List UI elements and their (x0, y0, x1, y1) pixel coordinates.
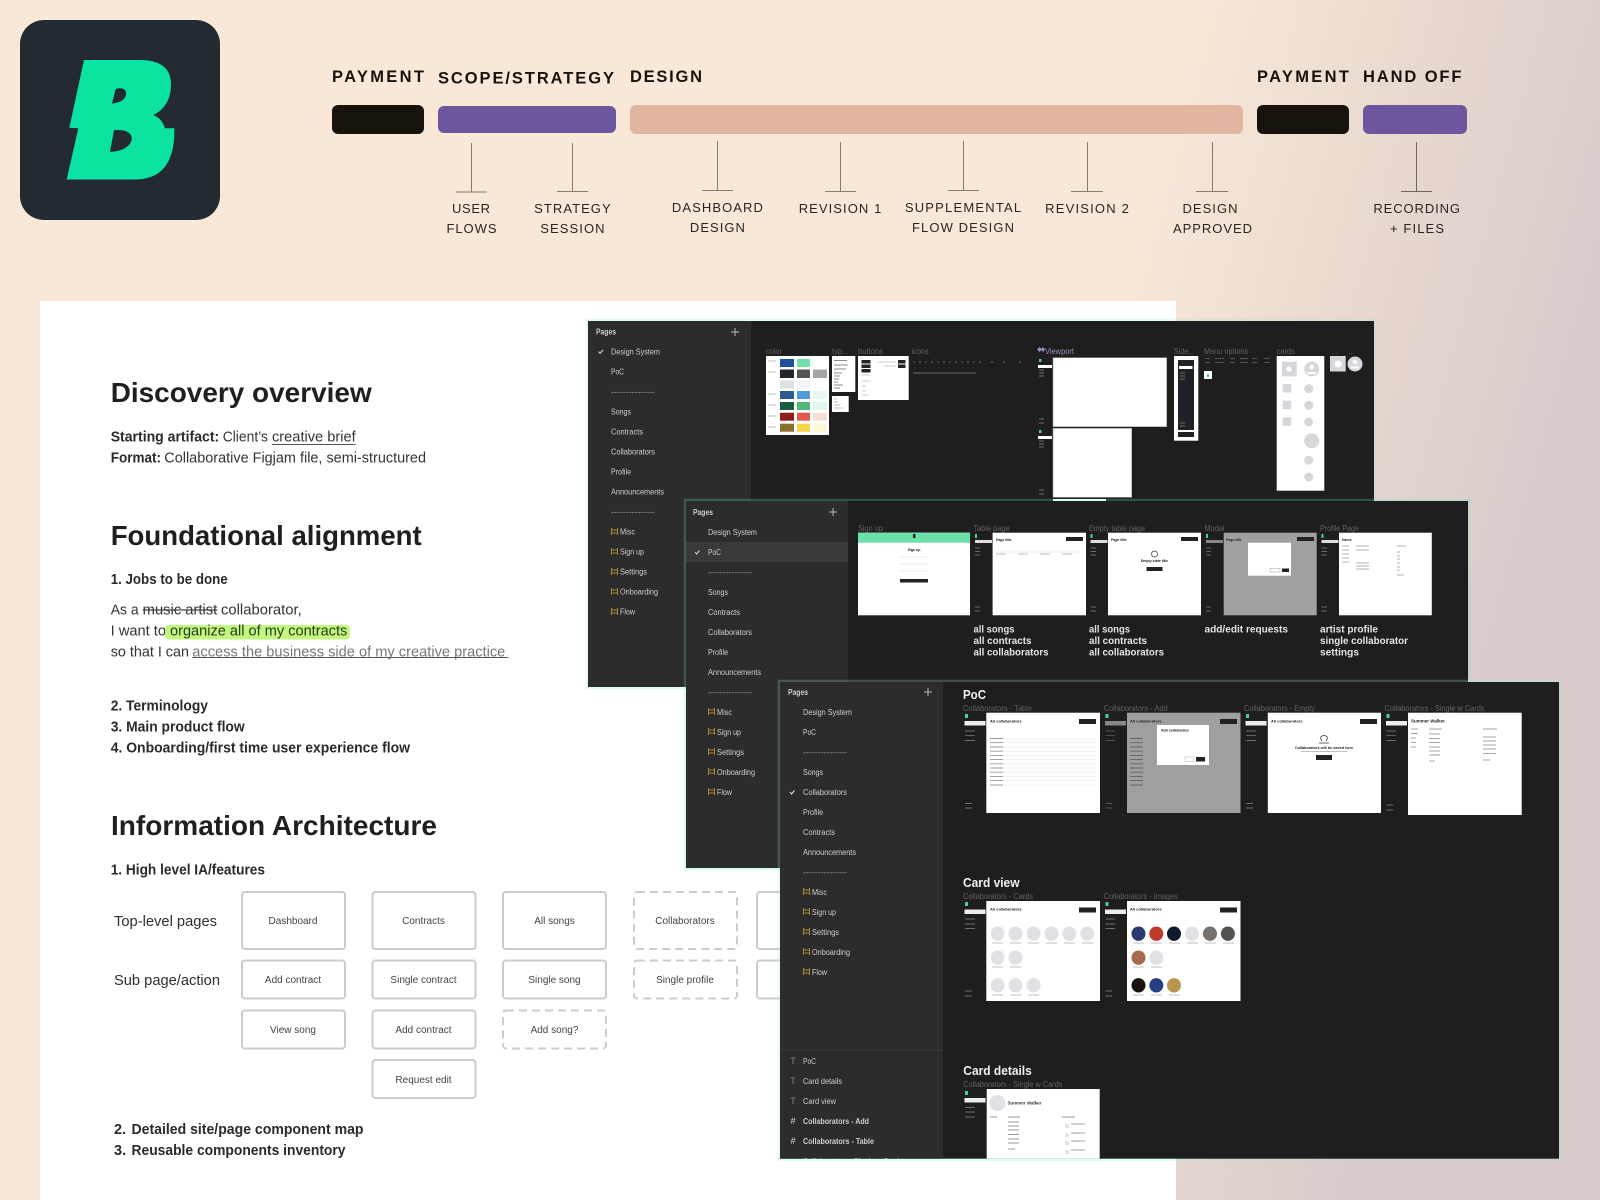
milestone: recording + files (1373, 142, 1460, 236)
section: card details frame (963, 1063, 1100, 1159)
sidebar: Pages (788, 688, 808, 697)
frame: collaborators empty: All collaborators (1271, 718, 1303, 724)
frame: collaborators single (1384, 704, 1522, 815)
frame: collaborators single: Summer Walker (1411, 718, 1445, 724)
panel: figma PoC templates (685, 500, 1469, 869)
frame: collaborators add: Collaborators - Add (1104, 704, 1168, 713)
frame: sign up: Sign up (858, 524, 884, 533)
sidebar component card (1174, 356, 1198, 441)
sidebar: Card view (803, 1097, 836, 1106)
phase: design (630, 68, 1243, 134)
sidebar: T (790, 1056, 796, 1066)
section: card details frame: Summer Walker (1008, 1100, 1042, 1106)
milestone: recording + files: RECORDING (1373, 201, 1460, 216)
sidebar: T (790, 1096, 796, 1106)
frame: profile page: Name (1342, 538, 1352, 542)
sidebar: PoC (803, 1057, 816, 1066)
job story line 2: organize all of my contracts (170, 624, 347, 640)
small avatars: ... (1331, 347, 1338, 356)
typography cards (832, 356, 855, 412)
sidebar: Sign up (620, 548, 644, 556)
starting artifact line: Starting artifact: (111, 430, 219, 446)
milestone: dashboard design (672, 141, 763, 235)
milestone: supplemental flow design: SUPPLEMENTAL (905, 200, 1021, 215)
milestone: dashboard design: DESIGN (690, 220, 745, 235)
starting artifact line: Client’s (223, 430, 268, 446)
frame: sign up (858, 524, 970, 615)
phase: hand off: HAND OFF (1363, 68, 1462, 86)
row label: sub page/action: Sub page/action (114, 973, 220, 989)
sidebar: Onboarding (620, 588, 658, 596)
frame: collaborators add: Add collaborator (1161, 728, 1190, 732)
sidebar: Settings (717, 748, 744, 757)
milestone: supplemental flow design (905, 141, 1021, 235)
job story line 1 (111, 602, 302, 618)
section: PoC frames (963, 687, 1522, 815)
sidebar: Contracts (611, 428, 643, 436)
frame: collaborators table (963, 704, 1100, 813)
sidebar: Sign up (717, 728, 741, 737)
frame: collaborators images: All collaborators (1130, 906, 1162, 912)
section: card view frames (963, 875, 1240, 1001)
sidebar: PoC (803, 728, 816, 737)
frame: empty table page: Empty state title (1141, 559, 1168, 563)
sidebar: Pages (693, 508, 713, 517)
phase: payment 2 (1257, 68, 1349, 134)
frame: modal: Page title (1226, 538, 1242, 542)
panel: figma design system (587, 320, 1375, 688)
frame: collaborators add (1104, 704, 1240, 813)
list: further IA items: 2. (114, 1122, 126, 1138)
canvas labels: Viewport (1045, 347, 1075, 356)
sidebar: Misc (620, 528, 635, 536)
icon: viewport component (1037, 347, 1045, 352)
IA box labels: Single song (528, 975, 581, 986)
IA box labels: Request edit (395, 1075, 452, 1086)
sidebar: T (790, 1076, 796, 1086)
IA box labels: Single profile (656, 975, 714, 986)
frame: collaborators single: Collaborators - Single w Cards (1384, 704, 1484, 713)
section: card details frame: Card details (963, 1063, 1032, 1078)
heading: Discovery overview (111, 377, 372, 408)
frame captions: all collaborators (1089, 646, 1164, 658)
milestone: user flows: USER (452, 201, 490, 216)
icons row (913, 362, 1021, 373)
list: remaining items: 3. Main product flow (111, 720, 245, 736)
section: information architecture (111, 810, 860, 1159)
frame: collaborators cards (963, 892, 1100, 1001)
frame: empty table page: Page title (1111, 538, 1127, 542)
row label: top-level pages: Top-level pages (114, 914, 217, 930)
canvas labels: Side... (1174, 347, 1194, 356)
IA box labels (265, 916, 715, 1086)
starting artifact line (111, 430, 357, 446)
sidebar: Onboarding (717, 768, 755, 777)
list: further IA items: Reusable components inventory (132, 1143, 346, 1159)
frame captions: single collaborator (1320, 635, 1408, 647)
heading: Foundational alignment (111, 520, 422, 551)
jobs to be done: 1. Jobs to be done (111, 572, 228, 588)
starting artifact line: creative brief (272, 430, 357, 446)
sidebar: PoC (708, 548, 721, 557)
IA box labels: Single contract (390, 975, 457, 986)
frame captions: add/edit requests (1204, 624, 1288, 636)
phase: design: DESIGN (630, 68, 702, 86)
sidebar: --------------- (708, 568, 752, 577)
job story line 1: As a (111, 602, 140, 618)
sidebar (588, 321, 751, 687)
list: remaining items: 2. Terminology (111, 699, 208, 715)
sidebar: --------------- (803, 748, 847, 757)
job story line 3: so that I can (111, 645, 189, 661)
job story line 1: music artist (143, 602, 217, 618)
sidebar: Misc (812, 888, 827, 897)
sidebar: Design System (803, 708, 852, 717)
sidebar: Collaborators - Table (803, 1137, 874, 1146)
milestone: revision 1: REVISION 1 (799, 201, 881, 216)
frame: collaborators cards: All collaborators (990, 906, 1022, 912)
milestone: dashboard design: DASHBOARD (672, 200, 763, 215)
milestone: revision 2: REVISION 2 (1045, 201, 1129, 216)
format line: Format: (111, 450, 161, 466)
sidebar (686, 501, 848, 868)
IA box labels: Add song? (531, 1025, 579, 1036)
milestone: strategy session: STRATEGY (534, 201, 611, 216)
frame: collaborators empty: Collaborators will be saved here (1295, 746, 1353, 750)
sidebar: Profile (611, 468, 631, 476)
IA box labels: Contracts (402, 916, 445, 927)
frame: table page (974, 524, 1086, 615)
canvas labels: icons (912, 347, 929, 356)
sidebar: Design System (611, 348, 660, 356)
frame: modal (1204, 524, 1317, 615)
frame: collaborators table: All collaborators (990, 718, 1022, 724)
canvas labels: buttons (858, 347, 883, 356)
frame captions: all songs (1089, 624, 1130, 636)
IA box labels: Add contract (395, 1025, 452, 1036)
milestone: user flows (446, 143, 497, 236)
frame: modal: Modal (1204, 524, 1225, 533)
canvas labels: typ... (832, 347, 848, 356)
sidebar: --------------- (611, 388, 655, 396)
frame captions: all contracts (1089, 635, 1147, 647)
section: card view frames: Card view (963, 875, 1020, 890)
list: further IA items (114, 1122, 364, 1159)
format line: Collaborative Figjam file, semi-structured (164, 450, 426, 466)
sidebar: Songs (708, 588, 728, 597)
phase: payment: PAYMENT (332, 68, 424, 86)
frame captions: artist profile (1320, 624, 1378, 636)
milestone: revision 1 (799, 142, 881, 216)
sidebar: Design System (708, 528, 757, 537)
job story line 1: collaborator, (221, 602, 302, 618)
milestone: design approved: DESIGN (1182, 201, 1238, 216)
sidebar: Flow (717, 788, 732, 797)
IA box labels: Dashboard (269, 916, 317, 927)
phase: scope/strategy: SCOPE/STRATEGY (438, 70, 614, 88)
frame: collaborators table: Collaborators - Table (963, 704, 1033, 713)
milestone: user flows: FLOWS (446, 221, 497, 236)
sidebar: --------------- (611, 508, 655, 516)
list: remaining items (111, 699, 411, 757)
sidebar: Onboarding (812, 948, 850, 957)
section: foundational alignment (111, 520, 508, 757)
IA box grid (242, 892, 860, 1098)
frame: collaborators empty (1244, 704, 1381, 813)
sidebar: Announcements (611, 488, 664, 496)
sidebar: Flow (812, 968, 827, 977)
frame: empty table page: Empty table page (1089, 524, 1145, 533)
frame captions: all songs (974, 624, 1015, 636)
sidebar: # (790, 1136, 796, 1146)
frame: sign up: Sign up (908, 548, 920, 552)
logo (20, 20, 220, 220)
milestone: strategy session (534, 143, 611, 236)
sidebar: Settings (812, 928, 839, 937)
frame: collaborators images: Collaborators - Images (1104, 892, 1178, 901)
frame captions: settings (1320, 646, 1359, 658)
sidebar: Misc (717, 708, 732, 717)
sidebar: Settings (620, 568, 647, 576)
frame: collaborators empty: Collaborators - Empty (1244, 704, 1315, 713)
panel: figma collaborators page (779, 681, 1560, 1166)
frame captions: all collaborators (974, 646, 1049, 658)
IA box labels: All songs (534, 916, 575, 927)
canvas labels: cards (1277, 347, 1295, 356)
timeline (332, 68, 1467, 236)
frame: profile page (1320, 524, 1432, 615)
cards component sheet (1277, 356, 1324, 491)
frame captions: all contracts (974, 635, 1032, 647)
canvas labels (766, 347, 1295, 356)
phase: payment 2: PAYMENT (1257, 68, 1349, 86)
color palette card (766, 356, 829, 435)
canvas labels: Menu options (1204, 347, 1248, 356)
sidebar: Contracts (708, 608, 740, 617)
sidebar: Collaborators - Add (803, 1117, 869, 1126)
IA box labels: Add contract (265, 975, 321, 986)
section: PoC frames: PoC (963, 687, 987, 702)
IA box labels: Collaborators (655, 916, 715, 927)
sidebar: Sign up (812, 908, 836, 917)
milestone: supplemental flow design: FLOW DESIGN (912, 220, 1014, 235)
sidebar: Profile (803, 808, 823, 817)
milestone: design approved (1173, 142, 1252, 236)
sidebar: Collaborators (611, 448, 655, 456)
viewport frames (1038, 358, 1167, 502)
sidebar: Flow (620, 608, 635, 616)
milestone: recording + files: + FILES (1390, 221, 1444, 236)
buttons card (858, 356, 909, 400)
sidebar: --------------- (708, 688, 752, 697)
sidebar: Collaborators - Single w Cards (803, 1157, 903, 1166)
frame: table page: Table page (974, 524, 1010, 533)
IA box labels: View song (270, 1025, 316, 1036)
frame: empty table page (1089, 524, 1201, 615)
milestone: design approved: APPROVED (1173, 221, 1252, 236)
sidebar: Songs (803, 768, 823, 777)
milestone: strategy session: SESSION (540, 221, 605, 236)
frame: profile page: Profile Page (1320, 524, 1359, 533)
milestone: revision 2 (1045, 142, 1129, 216)
sidebar: Contracts (803, 828, 835, 837)
frame: collaborators cards: Collaborators - Cards (963, 892, 1033, 901)
sidebar: Collaborators (708, 628, 752, 637)
heading: Information Architecture (111, 810, 437, 841)
frame: table page: Page title (996, 538, 1012, 542)
list: further IA items: Detailed site/page component map (132, 1122, 364, 1138)
phase: hand off (1363, 68, 1467, 134)
small avatars: ... (1348, 347, 1355, 356)
phase: scope/strategy (438, 70, 616, 133)
canvas labels: color (766, 347, 782, 356)
list: remaining items: 4. Onboarding/first time user experience flow (111, 741, 411, 757)
job story line 3: access the business side of my creative practice (192, 645, 505, 661)
panel: white document (40, 301, 1176, 1200)
phase: payment (332, 68, 424, 134)
sidebar: Announcements (708, 668, 761, 677)
sidebar: --------------- (803, 868, 847, 877)
sidebar: Songs (611, 408, 631, 416)
frame: collaborators images (1104, 892, 1240, 1001)
sidebar (780, 682, 943, 1166)
list: further IA items: 3. (114, 1143, 126, 1159)
small avatars (1330, 347, 1362, 372)
section: card details frame: Collaborators - Single w Cards (963, 1080, 1062, 1089)
sidebar: # (790, 1116, 796, 1126)
sidebar: Collaborators (803, 788, 847, 797)
subheading: 1. High level IA/features (111, 863, 265, 879)
sidebar: Pages (596, 328, 616, 336)
job story line 2: I want to (111, 624, 166, 640)
menu options (1204, 358, 1270, 379)
section: discovery overview (111, 377, 426, 466)
sidebar: PoC (611, 368, 624, 376)
sidebar: Announcements (803, 848, 856, 857)
frame: collaborators add: All collaborators (1130, 718, 1162, 724)
sidebar: Profile (708, 648, 728, 657)
frame captions (974, 624, 1408, 658)
sidebar: Card details (803, 1077, 842, 1086)
